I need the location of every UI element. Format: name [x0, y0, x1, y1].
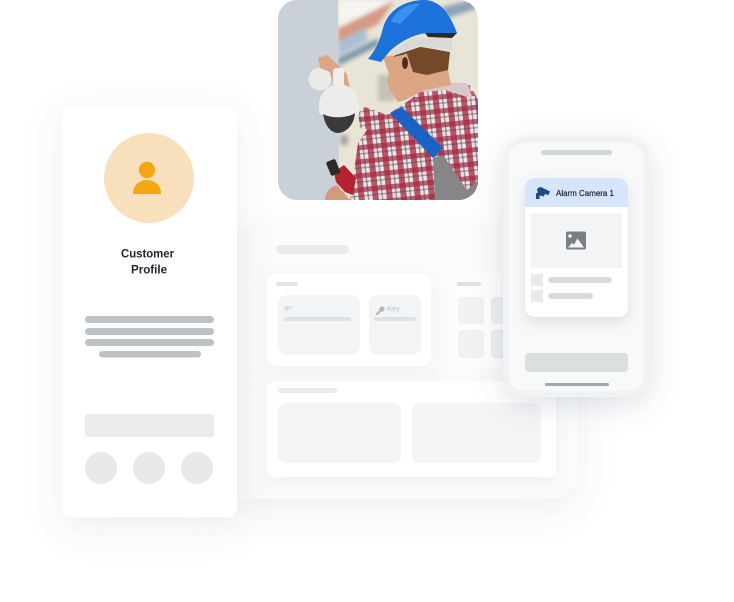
notification header: Alarm Camera 1: [556, 189, 615, 198]
heading: customer profile: Profile: [131, 262, 167, 276]
avatar circle: [104, 133, 194, 223]
face and neck: [383, 55, 451, 102]
icon: security camera: [536, 187, 550, 199]
phone home bar: [545, 383, 609, 386]
arm: [358, 107, 387, 130]
hair: [393, 45, 450, 75]
panel: dashboard: [225, 229, 578, 499]
action circles: [85, 452, 213, 484]
background building: [338, 0, 478, 145]
image placeholder: [531, 213, 622, 268]
photo: technician installing camera: [278, 0, 478, 200]
phone button: [525, 353, 628, 372]
hand on camera mount: [318, 55, 350, 88]
card: connection details: [267, 274, 431, 366]
field: Key: Key: [387, 304, 400, 313]
card: lower panels: [267, 381, 556, 477]
list rows: [531, 274, 612, 302]
ear: [402, 57, 408, 69]
text placeholder lines: [85, 316, 214, 358]
hard hat: [368, 0, 457, 62]
notification card: [525, 178, 628, 317]
mount on wall: [308, 68, 332, 90]
button placeholder: [85, 414, 214, 437]
field: IP: IP:: [284, 304, 293, 313]
phone mockup: [503, 136, 650, 397]
icon: person: [133, 162, 161, 194]
wall: [278, 0, 339, 200]
torso: [350, 85, 478, 200]
field: Key: [369, 295, 421, 355]
blue strap: [390, 107, 443, 158]
panel: customer profile: [62, 106, 237, 517]
dashboard header bar: [276, 245, 349, 254]
phone top bar: [541, 150, 612, 155]
collar: [421, 82, 473, 99]
drill and hand: [325, 159, 356, 200]
field: IP: [278, 295, 360, 355]
heading: customer profile: Customer: [121, 246, 174, 260]
card: tile grid: [450, 274, 520, 366]
icon: picture: [566, 232, 586, 250]
security camera: [319, 68, 359, 133]
apron: [433, 155, 478, 200]
